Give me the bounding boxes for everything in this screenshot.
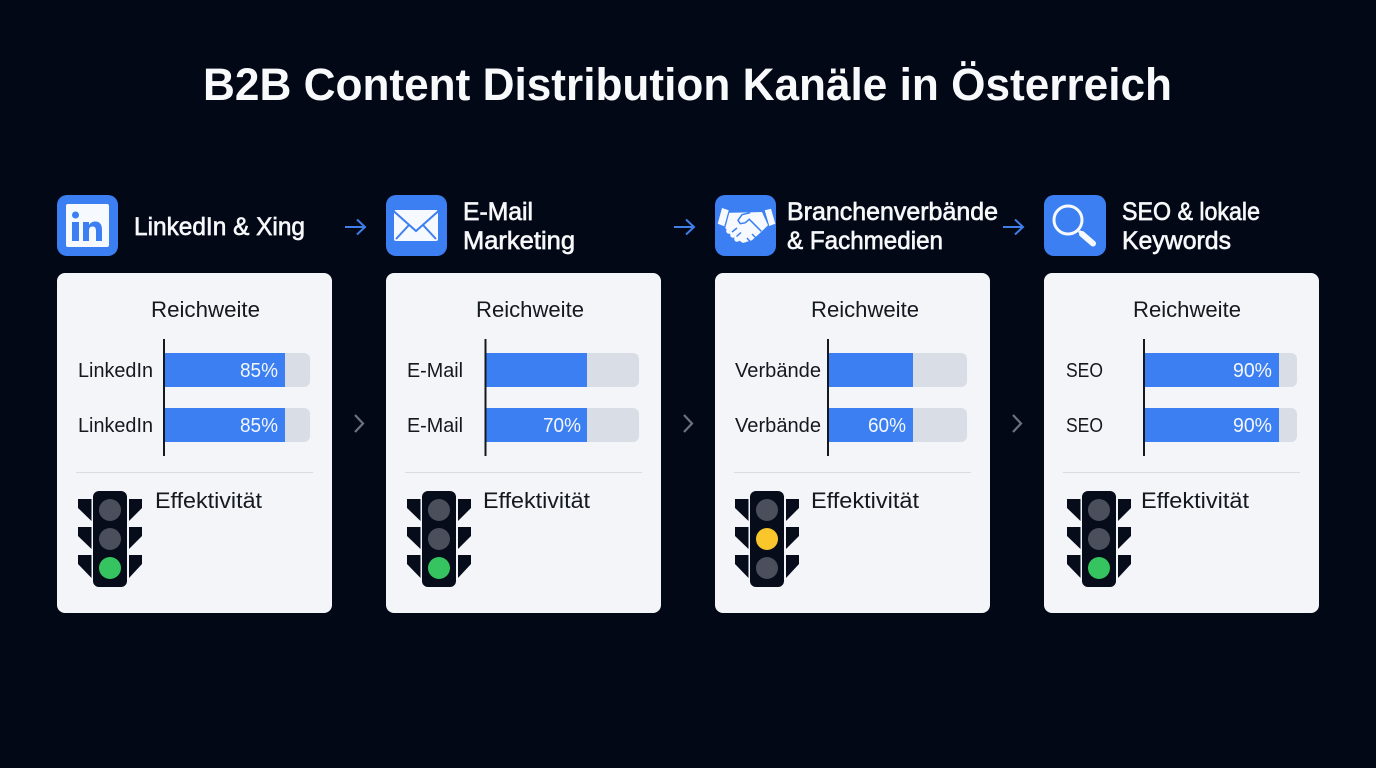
- icon: LinkedIn: [57, 195, 118, 256]
- heading: E-Mail Marketing: [463, 198, 575, 255]
- heading: Reichweite: Reichweite: [476, 297, 584, 322]
- arrow: [674, 220, 694, 234]
- icon: traffic light green: [1067, 491, 1131, 587]
- heading: Reichweite: Reichweite: [811, 297, 919, 322]
- arrow: [345, 220, 365, 234]
- icon: envelope: [386, 195, 447, 256]
- chevron: [684, 415, 692, 432]
- bar chart: Reichweite Verbände: Verbände: [735, 415, 821, 437]
- bar chart: Reichweite SEO: 90%: [1233, 415, 1272, 437]
- heading: E-Mail Marketing: Marketing: [463, 227, 575, 255]
- panel: LinkedIn: [57, 273, 332, 613]
- bar chart: Reichweite E-Mail: [407, 339, 639, 456]
- column: Branchenverbände & Fachmedien: [715, 195, 998, 613]
- heading: Branchenverbände & Fachmedien: & Fachmedien: [787, 227, 943, 255]
- bar chart: Reichweite E-Mail: E-Mail: [407, 415, 463, 437]
- icon: magnifier: [1044, 195, 1106, 256]
- icon: traffic light green: [78, 491, 142, 587]
- bar chart: Reichweite Verbände: 60%: [868, 415, 906, 437]
- bar chart: Reichweite Verbände: Verbände: [735, 360, 821, 382]
- bar chart: Reichweite LinkedIn: [78, 339, 310, 456]
- bar chart: Reichweite LinkedIn: LinkedIn: [78, 415, 153, 437]
- label: Effektivität: Effektivität: [811, 488, 919, 513]
- icon: traffic light yellow: [735, 491, 799, 587]
- bar chart: Reichweite SEO: [1066, 339, 1297, 456]
- heading: E-Mail Marketing: E-Mail: [463, 198, 533, 226]
- heading: SEO & lokale Keywords: [1122, 198, 1260, 255]
- column: LinkedIn & Xing: [57, 195, 332, 613]
- column: SEO & lokale Keywords: [1044, 195, 1319, 613]
- icon: handshake: [715, 195, 776, 256]
- heading: SEO & lokale Keywords: Keywords: [1122, 227, 1231, 255]
- label: Effektivität: Effektivität: [155, 488, 262, 513]
- label: Effektivität: Effektivität: [483, 488, 590, 513]
- heading: SEO & lokale Keywords: SEO & lokale: [1122, 198, 1260, 226]
- arrow: [1003, 220, 1023, 234]
- panel: SEO: [1044, 273, 1319, 613]
- heading: LinkedIn & Xing: LinkedIn & Xing: [134, 213, 305, 241]
- bar chart: Reichweite LinkedIn: 85%: [240, 415, 278, 437]
- bar chart: Reichweite Verbände: [735, 339, 967, 456]
- panel: Verbände: [715, 273, 990, 613]
- icon: traffic light green: [407, 491, 471, 587]
- bar chart: Reichweite E-Mail: 70%: [543, 415, 581, 437]
- bar chart: Reichweite LinkedIn: 85%: [240, 360, 278, 382]
- heading: Branchenverbände & Fachmedien: Branchenverbände: [787, 198, 998, 226]
- panel: E-Mail: [386, 273, 661, 613]
- bar chart: Reichweite LinkedIn: LinkedIn: [78, 360, 153, 382]
- bar chart: Reichweite SEO: SEO: [1066, 415, 1103, 437]
- label: Effektivität: Effektivität: [1141, 488, 1249, 513]
- bar chart: Reichweite E-Mail: E-Mail: [407, 360, 463, 382]
- heading: Branchenverbände & Fachmedien: [787, 198, 998, 255]
- heading: Reichweite: Reichweite: [1133, 297, 1241, 322]
- chevron: [1013, 415, 1021, 432]
- heading: Reichweite: Reichweite: [151, 297, 260, 322]
- column: E-Mail Marketing: [386, 195, 661, 613]
- title: B2B Content Distribution Kanäle in Österreich: [203, 59, 1172, 110]
- bar chart: Reichweite SEO: 90%: [1233, 360, 1272, 382]
- bar chart: Reichweite SEO: SEO: [1066, 360, 1103, 382]
- chevron: [355, 415, 363, 432]
